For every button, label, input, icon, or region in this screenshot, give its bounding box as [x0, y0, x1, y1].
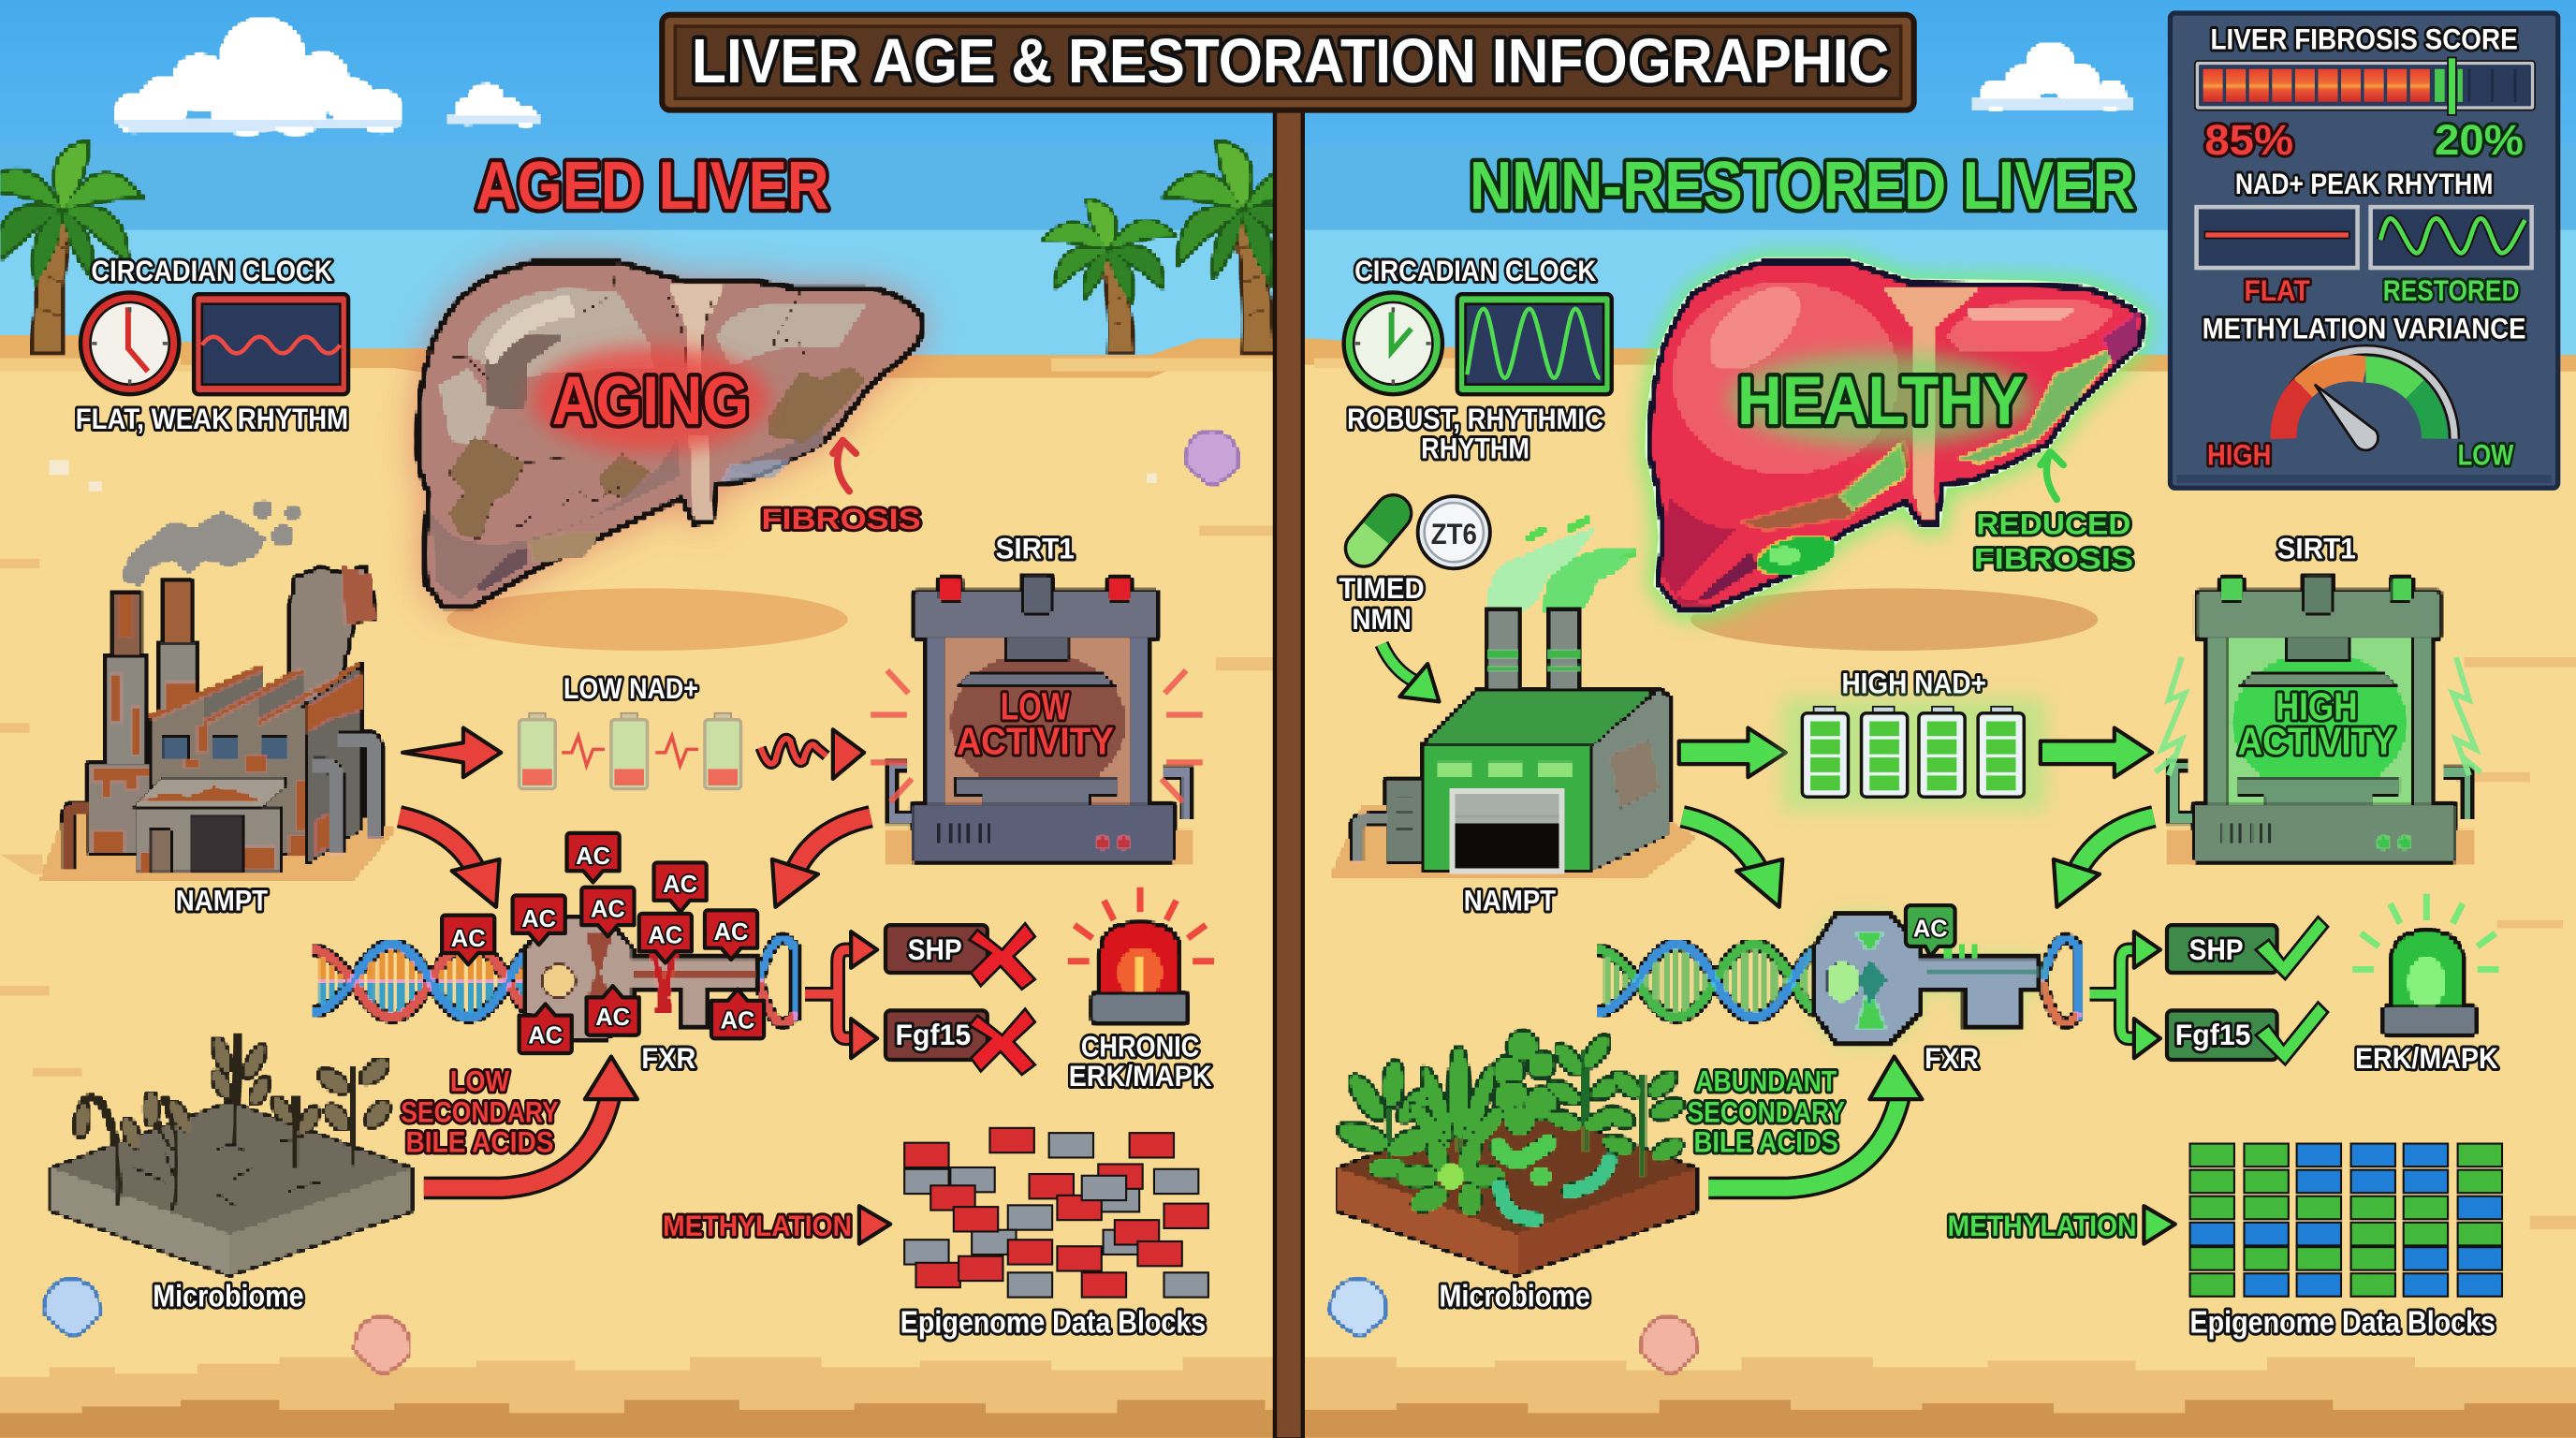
arrow: NAD to SIRT1: [2041, 728, 2152, 777]
label: activity: ACTIVITY: [956, 720, 1114, 763]
label: high: HIGH: [2276, 685, 2358, 728]
acetyl tags: AC: [714, 917, 748, 946]
icon: NMN pill: [1339, 488, 1419, 574]
arrow: factory to low NAD: [402, 728, 501, 777]
icon: green alarm: [2352, 894, 2499, 1034]
decor: pebbles: [50, 460, 1157, 492]
icon: clock robust: [1344, 292, 1442, 394]
circadian clock: restored: [1344, 254, 1612, 465]
target: Fgf15 active: Fgf15: [2175, 1018, 2250, 1051]
arrow: methylation: [2144, 1206, 2175, 1244]
decor: pink shell: [355, 1318, 409, 1373]
green smoke: [1488, 520, 1634, 611]
healthy liver: [1651, 263, 2143, 608]
title board: [662, 15, 1914, 110]
caption: flat weak rhythm: FLAT, WEAK RHYTHM: [76, 402, 348, 435]
label: ERK/MAPK: ERK/MAPK: [1069, 1059, 1212, 1093]
acetyl tags: AC: [451, 924, 486, 952]
icon: full batteries: [1782, 698, 2045, 810]
icon: red alarm: [1068, 888, 1214, 1022]
chart: variance gauge: [2277, 350, 2454, 450]
center divider post: [1275, 82, 1303, 1438]
label: aging: AGING: [552, 361, 749, 439]
liver shadow: [1690, 588, 2098, 651]
label: methylation: METHYLATION: [1948, 1209, 2137, 1242]
palm trees: [0, 141, 1323, 352]
label: FXR: FXR: [1925, 1041, 1979, 1075]
arrow: SIRT1 to FXR: [772, 816, 871, 907]
target: SHP active: [2167, 917, 2328, 979]
microbiome: barren soil: [52, 1035, 411, 1273]
caption: robust rhythmic rhythm: ROBUST, RHYTHMIC: [1347, 402, 1603, 435]
label: SIRT1: SIRT1: [2277, 532, 2356, 565]
chart: ordered epigenome blocks: [2190, 1144, 2502, 1297]
panel: aged liver: [41, 149, 1237, 1373]
heading: NMN-restored liver: NMN-RESTORED LIVER: [1470, 149, 2135, 224]
target: SHP blocked: [886, 923, 1035, 990]
label: abundant secondary bile acids: SECONDARY: [1687, 1095, 1845, 1129]
circadian label: CIRCADIAN CLOCK: [1354, 254, 1596, 287]
target: SHP blocked: SHP: [908, 932, 962, 966]
acetyl tags: AC: [591, 894, 625, 922]
heading: liver fibrosis score: LIVER FIBROSIS SCORE: [2210, 22, 2518, 56]
label: microbiome: Microbiome: [1439, 1279, 1590, 1313]
acetyl tags: AC: [528, 1020, 563, 1049]
label: low secondary bile acids: LOW: [450, 1064, 509, 1097]
target: Fgf15 blocked: [886, 1009, 1035, 1075]
heading: NAD peak rhythm: NAD+ PEAK RHYTHM: [2235, 167, 2493, 200]
caption line two: RHYTHM: [1421, 432, 1530, 465]
arrow: methylation: [859, 1206, 890, 1244]
label: NAMPT: NAMPT: [1464, 883, 1556, 917]
acetyl tags: AC: [663, 870, 697, 898]
arrow: bracket to SHP and Fgf15: [2089, 932, 2160, 1058]
label: low: LOW: [1001, 685, 1070, 728]
acetyl tags: AC: [648, 920, 682, 948]
heading: aged liver: AGED LIVER: [476, 149, 828, 224]
key: FXR acetylated: [526, 918, 755, 1040]
acetyl tag: single: [1906, 905, 1955, 956]
label: low NAD: LOW NAD+: [564, 671, 698, 705]
arrow: factory to FXR: [1682, 816, 1782, 907]
label: FXR: FXR: [641, 1041, 695, 1075]
arrow: SIRT1 to FXR: [2054, 816, 2154, 907]
target: Fgf15 active: [2167, 1003, 2328, 1064]
value: 20 percent: 20%: [2435, 116, 2524, 164]
chart: restored rhythm box: [2371, 207, 2532, 268]
label: methylation: METHYLATION: [663, 1209, 852, 1242]
label: abundant secondary bile acids: [1687, 1064, 1845, 1158]
label: microbiome: Microbiome: [153, 1279, 304, 1313]
label: epigenome blocks: Epigenome Data Blocks: [2190, 1305, 2496, 1340]
DNA: aged: [312, 939, 795, 1023]
label: low secondary bile acids: BILE ACIDS: [406, 1124, 553, 1158]
label: low: LOW: [2458, 438, 2513, 472]
label: fibrosis: FIBROSIS: [1974, 541, 2133, 575]
label: ERK/MAPK: ERK/MAPK: [2355, 1041, 2498, 1075]
decor: pink shell: [1641, 1318, 1695, 1373]
label: high: HIGH: [2207, 438, 2271, 472]
target: Fgf15 blocked: Fgf15: [896, 1018, 971, 1051]
label: flat: FLAT: [2244, 273, 2310, 307]
label: NMN: NMN: [1352, 602, 1412, 636]
arrow: to fibrosis: [833, 440, 856, 492]
panel: restored liver: [1331, 149, 2502, 1373]
arrow: NMN to factory: [1382, 644, 1439, 701]
factory: green NAMPT: [1331, 609, 1695, 877]
label: NAMPT: NAMPT: [176, 883, 268, 917]
label: low secondary bile acids: [401, 1064, 559, 1158]
clouds: [115, 18, 2132, 135]
circadian label: CIRCADIAN CLOCK: [91, 254, 333, 287]
machine: SIRT1 press low activity: [871, 575, 1203, 862]
aged liver: [418, 263, 921, 607]
chart: flat rhythm monitor: [194, 294, 348, 394]
arrow: microbiome to FXR: [1708, 1057, 1922, 1188]
label: abundant secondary bile acids: ABUNDANT: [1695, 1064, 1837, 1097]
acetyl tags: AC: [721, 1006, 754, 1034]
decor: blue shell: [44, 1280, 98, 1336]
panel: metrics dashboard: [2170, 13, 2558, 488]
decorative sand bands: [0, 1357, 2576, 1438]
chart: flat rhythm box: [2197, 207, 2358, 268]
machine: SIRT1 press high activity: [2156, 575, 2481, 862]
chart: scattered epigenome blocks: [904, 1128, 1208, 1298]
label: SIRT1: SIRT1: [996, 532, 1075, 565]
circadian clock: aged: [76, 254, 348, 435]
target: SHP active: SHP: [2189, 932, 2244, 966]
arrow: factory to high NAD: [1679, 728, 1786, 777]
acetyl tag: single: AC: [1913, 914, 1948, 942]
heading: methylation variance: METHYLATION VARIANCE: [2203, 312, 2525, 345]
microbiome: thriving soil: [1335, 1032, 1695, 1273]
arrow: microbiome to FXR: [424, 1057, 637, 1188]
arrow: bracket to SHP and Fgf15: [805, 932, 877, 1058]
label: timed: TIMED: [1339, 571, 1425, 605]
decor: purple shell: [1186, 432, 1237, 485]
arrow: squiggle to SIRT1: [761, 729, 864, 779]
label: healthy: HEALTHY: [1737, 361, 2025, 439]
DNA: restored: [1597, 939, 2078, 1023]
label: abundant secondary bile acids: BILE ACIDS: [1694, 1124, 1838, 1158]
chart: robust rhythm monitor: [1457, 294, 1612, 394]
acetyl tags: AC: [521, 904, 556, 932]
acetyl tags: AC: [576, 842, 610, 870]
arrow: factory to FXR: [399, 816, 500, 907]
label: activity: ACTIVITY: [2237, 720, 2395, 763]
title: LIVER AGE & RESTORATION INFOGRAPHIC: [692, 27, 1889, 96]
label: fibrosis: FIBROSIS: [761, 502, 921, 536]
smoke from factory: [122, 501, 299, 585]
decor: blue shell: [1331, 1280, 1385, 1336]
icon: ZT6 clock: [1418, 496, 1490, 568]
chart: fibrosis bar: [2195, 57, 2535, 115]
value: 85 percent: 85%: [2204, 116, 2293, 164]
label: low secondary bile acids: SECONDARY: [401, 1095, 559, 1129]
acetyl tags: AC: [595, 1003, 630, 1031]
icon: clock weak: [80, 292, 179, 394]
key: FXR restored: [1814, 916, 2039, 1042]
arrow: to reduced fibrosis: [2041, 452, 2063, 500]
label: restored: RESTORED: [2383, 273, 2519, 307]
acetyl tags: [442, 833, 764, 1053]
liver shadow: [446, 588, 848, 651]
rays: [871, 670, 1203, 801]
icon: low batteries: [520, 713, 741, 788]
label: high NAD: HIGH NAD+: [1841, 667, 1986, 700]
icon: ZT6 clock: ZT6: [1431, 517, 1477, 550]
label: epigenome blocks: Epigenome Data Blocks: [900, 1305, 1206, 1340]
label: reduced: REDUCED: [1976, 506, 2130, 540]
factory: rusty NAMPT: [41, 567, 394, 879]
label: chronic: CHRONIC: [1081, 1030, 1199, 1064]
